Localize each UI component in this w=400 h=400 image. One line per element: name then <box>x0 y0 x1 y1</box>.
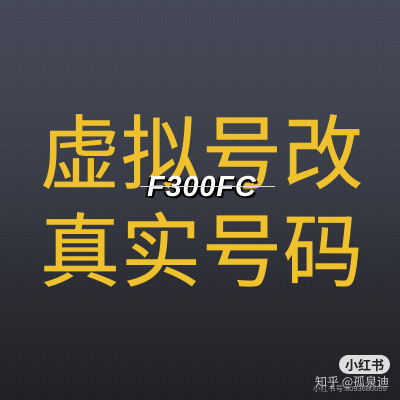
zhihu author credit: 知乎 @孤泉迪 <box>315 373 389 390</box>
headline line 2: 真实号码 <box>40 188 364 304</box>
xiaohongshu id: 小红书号:8093680059 <box>313 384 387 393</box>
headline line 1: 虚拟号改 <box>40 90 364 206</box>
watermark code: F300FC <box>147 171 257 203</box>
badge: xiaohongshu logo: 小红书 <box>345 355 384 374</box>
